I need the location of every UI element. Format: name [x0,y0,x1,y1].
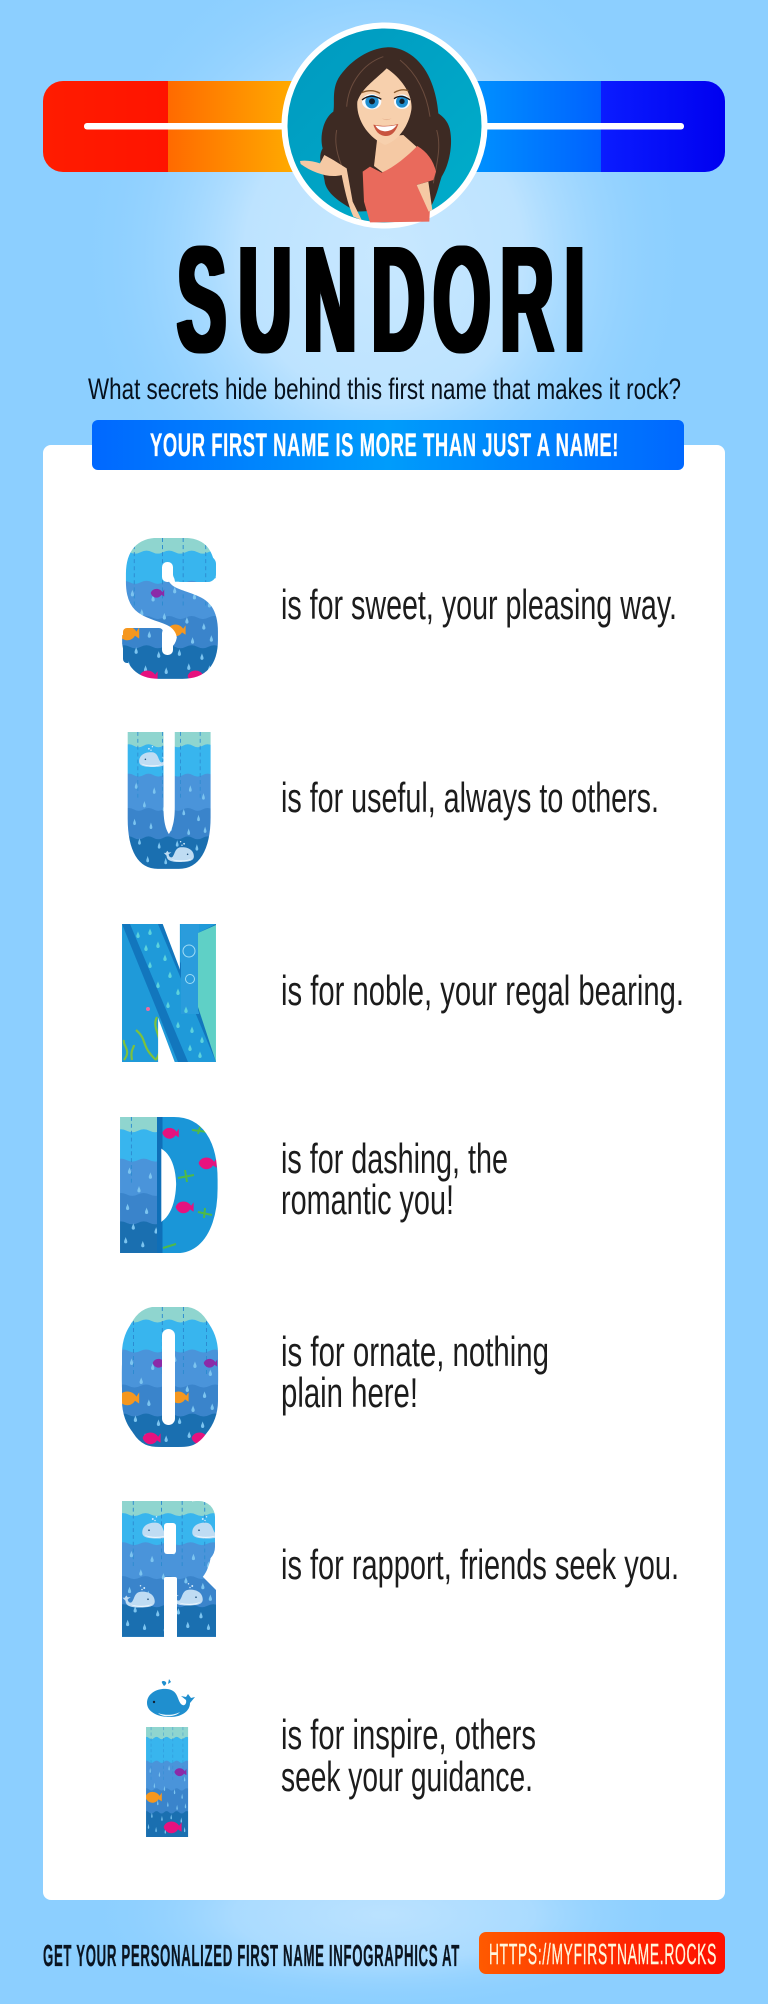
shirt [363,146,436,222]
title: SUNDORI [177,217,585,384]
main white panel [43,445,725,1900]
row text: D: is for dashing, the [281,1135,508,1182]
letter I [144,1727,190,1838]
face [357,68,412,145]
letter D [120,1117,218,1253]
letter R [122,1501,216,1637]
mouth [373,124,398,136]
row text: I: is for inspire, others [281,1711,536,1758]
hair [320,47,451,212]
row text: I [281,1711,536,1800]
banner [92,420,684,470]
letter O [117,1307,223,1447]
arm and hand [300,155,362,220]
nose [382,118,392,120]
eyebrows [362,90,408,93]
neck [374,135,418,174]
row text: D [281,1135,508,1223]
row text: O [281,1328,549,1416]
header colour bar [43,81,725,172]
row text: D: romantic you! [281,1176,454,1223]
row text: O: plain here! [281,1369,418,1416]
letter S [118,538,222,682]
footer url button [479,1932,725,1974]
icon: blue whale dot of letter I [147,1679,195,1717]
letter N [122,924,216,1062]
row text: O: is for ornate, nothing [281,1328,549,1375]
eyes [362,94,381,109]
row text: I: seek your guidance. [281,1753,533,1800]
letter U [124,732,214,869]
avatar: smiling woman in a circle [284,26,484,226]
